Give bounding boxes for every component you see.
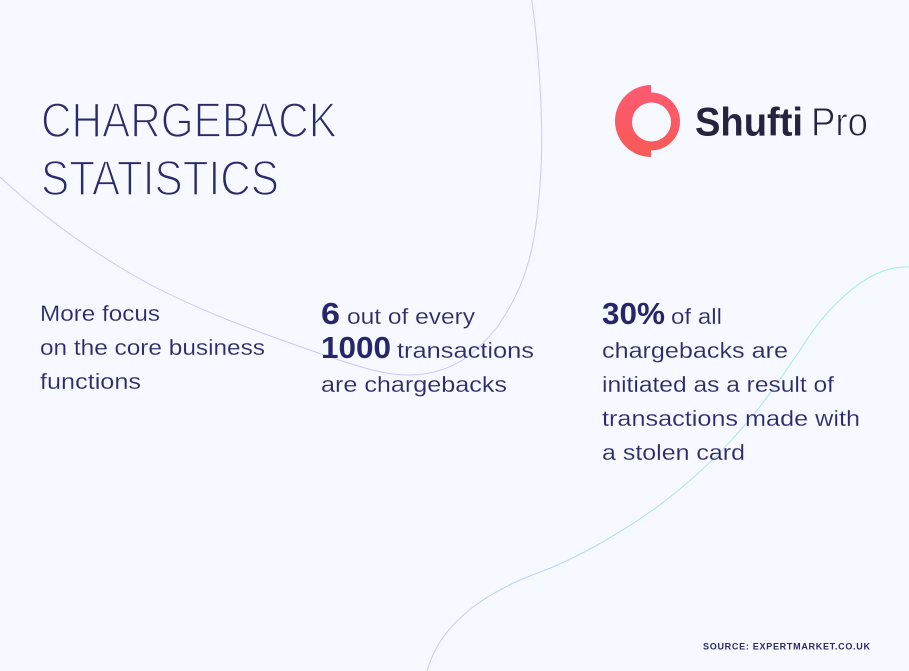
text block: column 3: initiated as a result of [602, 372, 835, 397]
logo wordmark: Pro [811, 100, 868, 144]
title: STATISTICS [41, 152, 279, 206]
text block: column 2: transactions [397, 338, 534, 363]
text block: column 1: on the core business [40, 335, 265, 360]
source note: SOURCE: EXPERTMARKET.CO.UK [703, 642, 870, 652]
text block: column 3: 30% [602, 296, 665, 331]
text block: column 3: a stolen card [602, 440, 745, 465]
text block: column 2: out of every [347, 304, 476, 329]
text block: column 2: 6 [321, 296, 340, 331]
text block: column 2: are chargebacks [321, 372, 507, 397]
logo wordmark: Shufti [695, 100, 803, 144]
icon: logo ring [615, 85, 680, 157]
logo wordmark [695, 100, 868, 144]
logo: Shufti Pro [615, 85, 868, 157]
teal decorative curve [427, 267, 909, 671]
text block: column 2 [321, 296, 534, 397]
text block: column 3: of all [671, 304, 722, 329]
title [41, 94, 337, 206]
text block: column 2: 1000 [321, 330, 391, 365]
text block: column 1: More focus [40, 301, 160, 326]
purple decorative curve [0, 0, 542, 375]
text block: column 1 [40, 301, 265, 394]
title: CHARGEBACK [41, 94, 337, 148]
text block: column 3: transactions made with [602, 406, 860, 431]
text block: column 3 [602, 296, 860, 465]
text block: column 1: functions [40, 369, 141, 394]
text block: column 3: chargebacks are [602, 338, 788, 363]
